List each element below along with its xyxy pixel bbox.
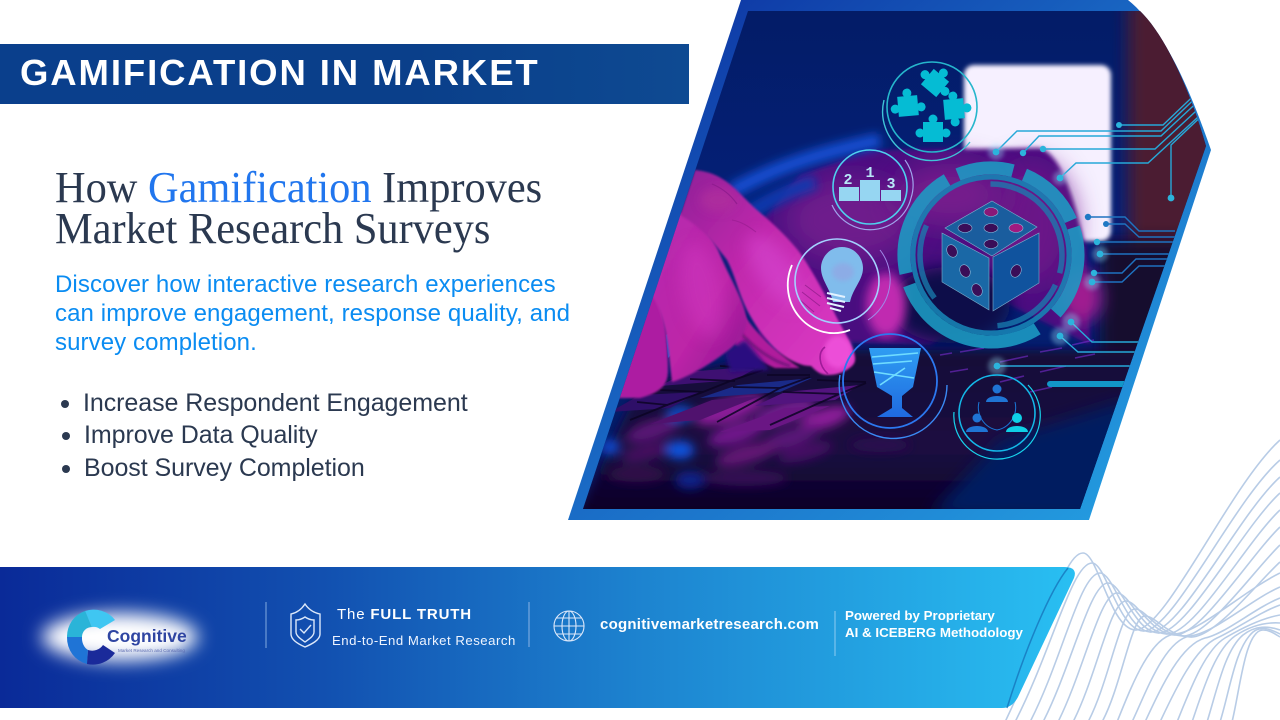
subheading text <box>55 271 570 356</box>
icon: podium <box>832 150 913 230</box>
keyboard <box>575 340 1150 520</box>
subheading text: survey completion. <box>55 329 257 356</box>
heading <box>55 163 542 253</box>
bright window <box>964 65 1111 241</box>
tagline line 2: End-to-End Market Research <box>332 633 516 648</box>
photo frame <box>568 0 1211 520</box>
puzzle piece 1 <box>920 68 950 98</box>
blurred key blobs <box>600 388 910 489</box>
tagline line 1: The FULL TRUTH <box>337 606 472 623</box>
powered by text <box>845 608 1023 640</box>
icon: shield <box>291 604 320 647</box>
heading: Market Research Surveys <box>55 204 490 253</box>
sharp keys near finger <box>610 366 860 432</box>
background knuckles <box>866 273 906 337</box>
circuit lines <box>998 98 1198 387</box>
puzzle piece 2 <box>890 88 926 117</box>
icon: podium: 1 <box>865 165 875 182</box>
divider <box>265 602 267 648</box>
bullet list <box>61 389 468 482</box>
photo image <box>583 11 1206 509</box>
icon: people <box>954 375 1040 459</box>
index finger <box>680 170 855 375</box>
purple background hand <box>745 148 1090 345</box>
subheading text: can improve engagement, response quality, and <box>55 300 570 327</box>
second finger <box>640 212 747 382</box>
hand <box>600 170 855 398</box>
shadow under hand <box>725 340 770 372</box>
icon: dice ring <box>897 161 1085 348</box>
bullet: completion: Boost Survey Completion <box>84 454 365 482</box>
footer tagline <box>332 606 516 648</box>
powered by text: Powered by Proprietary <box>845 608 995 623</box>
subheading text: Discover how interactive research experiences <box>55 271 556 298</box>
wave overlay on footer <box>1007 568 1068 708</box>
logo <box>67 610 187 665</box>
logo glow <box>42 613 198 661</box>
bullet: data quality: Improve Data Quality <box>84 421 318 449</box>
blue sleeve streak <box>730 140 880 192</box>
icon: chalice <box>839 334 947 438</box>
icon: light bulb <box>788 239 890 333</box>
heading: How Gamification Improves <box>55 163 542 212</box>
powered by text: AI & ICEBERG Methodology <box>845 625 1023 640</box>
icon: puzzle pieces <box>883 58 977 161</box>
fold behind index finger <box>735 312 800 368</box>
bullet: engagement: Increase Respondent Engagement <box>83 389 468 417</box>
icon: podium: 3 <box>886 176 896 193</box>
icon: podium: 2 <box>843 172 853 189</box>
divider <box>528 602 530 647</box>
icon: dice <box>942 201 1039 311</box>
title text: GAMIFICATION IN MARKET <box>20 52 540 93</box>
logo: Cognitive <box>107 626 187 646</box>
title banner <box>0 44 689 104</box>
logo: Market Research and Consulting <box>118 648 185 653</box>
website url: cognitivemarketresearch.com <box>600 616 819 633</box>
dark area inside ring <box>890 267 1010 343</box>
icon: globe <box>554 611 584 641</box>
puzzle piece 3 <box>943 92 972 126</box>
gap under fingers <box>666 334 670 358</box>
dark red wall strip <box>1128 0 1218 260</box>
puzzle piece 4 <box>916 114 950 142</box>
divider <box>834 611 836 656</box>
third finger <box>620 294 670 400</box>
photo panel: hand on keyboard with game icons <box>568 0 1211 520</box>
